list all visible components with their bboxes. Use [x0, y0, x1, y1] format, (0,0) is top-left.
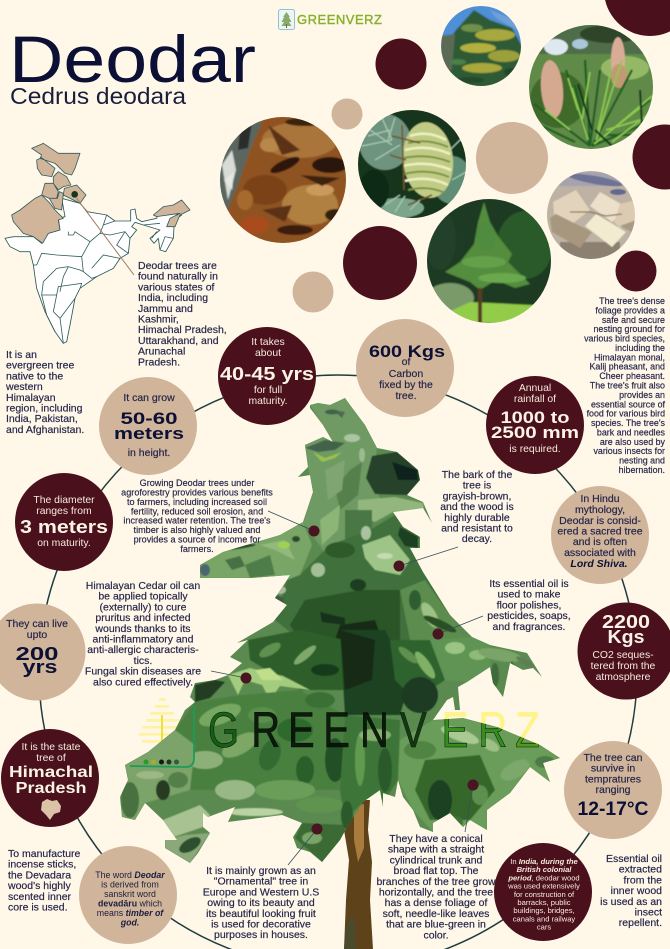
watermark: green frame [130, 706, 194, 767]
stat: state tree: Pradesh [16, 780, 86, 797]
watermark: yellow logo behind tree: GREENVERZ [208, 702, 540, 758]
text: cedar oil: be applied topically [98, 591, 188, 603]
stat: temperature: tempratures [585, 773, 641, 785]
text: nesting and food: food for various bird [587, 409, 665, 419]
text: bark: and resistant to [441, 522, 513, 534]
stat: colonial India: British colonial [517, 865, 572, 874]
stat: CO2: CO2 seques- [592, 650, 654, 661]
stat: word origin: sanskrit word [104, 889, 156, 899]
text: evergreen tree: western [5, 381, 43, 393]
text: essential oil uses: used to make [497, 589, 561, 601]
tree illustration [110, 395, 570, 949]
text: nesting and food: nesting and [619, 456, 665, 466]
text: evergreen tree: India, Pakistan, [6, 413, 78, 425]
stat: mythology: Deodar is consid- [559, 515, 641, 527]
stat: temperature: 12-17°C [578, 799, 649, 820]
text: cedar oil: Himalayan Cedar oil can [86, 580, 200, 592]
text: cedar oil: pruritus and infected [95, 612, 191, 624]
stat: CO2: tered from the [591, 661, 656, 672]
stat: rainfall: 2500 mm [491, 424, 579, 442]
stat: mythology: ered a sacred tree [557, 526, 643, 538]
stat: rainfall [486, 376, 584, 474]
photo: golden deodar tree [441, 6, 521, 86]
text: agroforestry: fertility, reduced soil erosion, and [131, 506, 263, 516]
stat: maturity: about [255, 348, 281, 359]
text: conical shape: color. [423, 929, 449, 941]
text: conical shape: that are blue-green in [386, 919, 486, 931]
stat: state tree: It is the state [22, 742, 81, 753]
text: evergreen tree: It is an [6, 349, 37, 361]
callout markers on tree [211, 511, 483, 865]
stat: height: It can grow [123, 392, 175, 404]
stat: diameter: 3 meters [20, 517, 108, 537]
stat: height: 50-60 [120, 409, 178, 428]
text: nesting and food: species. The tree's [591, 418, 666, 428]
map: leader line [77, 198, 134, 275]
text: incense sticks: the Devadara [8, 869, 71, 881]
stat: word origin: The word Deodar [95, 870, 165, 880]
stat: word origin: god. [120, 918, 139, 928]
text: native states: various states of [138, 281, 215, 293]
stat: colonial India: for construction of [514, 890, 575, 899]
stat: mythology: Lord Shiva. [570, 558, 628, 570]
stat: carbon: fixed by the [379, 379, 433, 391]
stat: word origin [79, 846, 177, 944]
subtitle: Cedrus deodara [10, 83, 186, 109]
photo: green deodar cone [358, 110, 466, 218]
text: evergreen tree: and Afghanistan. [6, 424, 84, 436]
text: bark: and the wood is [440, 501, 514, 513]
stat: diameter: The diameter [33, 495, 95, 506]
stat: word origin: means timber of [97, 908, 164, 918]
stat: word origin: devadāru which [98, 898, 162, 908]
text: incense sticks: scented inner [8, 891, 72, 903]
photo: pine needles with pink cones [528, 24, 654, 150]
text: insect repellent: inner wood [611, 885, 662, 897]
photo: deodar in forest [424, 198, 553, 324]
text: nesting and food: Kalij pheasant, and [590, 362, 665, 372]
text: insect repellent: extracted [619, 864, 662, 876]
stat: CO2: 2200 [602, 612, 650, 632]
text: ornamental: owing to its beauty and [207, 897, 315, 909]
text: agroforestry: agroforestry provides various benefits [121, 487, 273, 497]
stat: diameter [15, 473, 113, 571]
stat: lifespan: yrs [22, 657, 58, 677]
stat: colonial India: buildings, bridges, [513, 906, 575, 915]
stat: lifespan [0, 604, 86, 700]
text: evergreen tree: Himalayan [6, 392, 56, 404]
map of India [5, 143, 190, 343]
title: Deodar [9, 22, 256, 96]
text: nesting and food: various bird species, [584, 334, 665, 344]
text: ornamental: is used for decorative [211, 918, 311, 930]
stat: lifespan: 200 [16, 644, 58, 664]
text: evergreen tree: evergreen tree [6, 360, 74, 372]
text: cedar oil: also cured effectively. [93, 676, 193, 688]
watermark: dots [144, 760, 179, 764]
map: state borders [33, 215, 173, 343]
text: cedar oil: Fungal skin diseases are [85, 666, 201, 678]
stat: colonial India: cars [537, 923, 551, 932]
photo: bark [215, 115, 350, 245]
text: agroforestry: farmers. [180, 544, 214, 554]
logo: Greenverz header: GREENVERZ [297, 12, 382, 27]
stat: diameter: ranges from [36, 506, 92, 517]
text: bark: highly durable [444, 512, 510, 524]
watermark: dark logo over tree: GREENV ERZ [208, 702, 540, 758]
text: essential oil uses: pesticides, soaps, [487, 610, 571, 622]
stat: diameter: on maturity. [37, 538, 91, 549]
stat: carbon: tree. [395, 390, 417, 402]
decorative circles cluster [292, 0, 670, 312]
stat: temperature [564, 741, 662, 839]
text: nesting and food: The tree's dense [599, 296, 665, 306]
text: ornamental: It is mainly grown as an [206, 865, 316, 877]
stat: maturity: for full [254, 385, 282, 396]
stat: state tree: tree of [36, 753, 66, 764]
stat: carbon: of [402, 356, 410, 368]
stat: colonial India: In India, during the [510, 857, 579, 866]
photo: soaps with lavender [545, 170, 637, 262]
stat: colonial India: period, deodar wood [507, 873, 580, 882]
stat: mythology: associated with [564, 547, 636, 559]
text: native states: Kashmir, [138, 314, 179, 326]
text: bark: tree is [463, 480, 491, 492]
stat: carbon: Carbon [389, 368, 423, 380]
text: incense sticks: core is used. [8, 902, 68, 914]
text: native states: Pradesh. [138, 356, 180, 368]
text: evergreen tree: region, including [6, 402, 83, 414]
stat: colonial India: was used extensively [507, 882, 580, 891]
stat: maturity: It takes [251, 337, 285, 348]
text: incense sticks: incense sticks, [8, 859, 76, 871]
text: nesting and food: The tree's fruit also [590, 381, 665, 391]
text: cedar oil: wounds thanks to its [94, 623, 191, 635]
text: nesting and food: bark and needles [597, 427, 666, 437]
text: incense sticks: wood's highly [7, 880, 71, 892]
text: nesting and food: nesting ground for [593, 324, 665, 334]
stat: CO2: atmosphere [596, 672, 651, 683]
text: agroforestry: timber is also highly valued and [134, 525, 260, 535]
text: agroforestry: Growing Deodar trees under [140, 478, 254, 488]
text: nesting and food: hibernation. [619, 465, 665, 475]
text: essential oil uses: Its essential oil is [489, 578, 569, 590]
stat: lifespan: They can live [6, 618, 68, 630]
text: nesting and food: various insects for [593, 446, 665, 456]
text: agroforestry: provides a source of income for [134, 535, 260, 545]
stat: height [99, 377, 197, 475]
stat: mythology: and is often [573, 536, 627, 548]
text: nesting and food: including the [615, 343, 665, 353]
text: nesting and food: Himalayan monal, [594, 352, 665, 362]
text: conical shape: cylindrical trunk and [390, 854, 483, 866]
text: bark: decay. [462, 533, 492, 545]
stat: maturity [218, 327, 316, 425]
stat: maturity: maturity. [248, 396, 288, 407]
tree foliage [110, 395, 570, 865]
map: location marker [71, 191, 78, 198]
text: nesting and food: safe and secure [602, 315, 665, 325]
text: insect repellent: from the [623, 874, 662, 886]
text: conical shape: broad flat top. The [393, 865, 479, 877]
stat: rainfall: Annual [519, 383, 551, 394]
text: conical shape: branches of the tree grow [376, 876, 496, 888]
text: native states: Himachal Pradesh, [138, 324, 227, 336]
stat: state tree: Himachal [9, 764, 93, 781]
text: native states: found naturally in [138, 271, 218, 283]
stat: colonial India: barracks, public [517, 898, 571, 907]
text: insect repellent: is used as an [600, 896, 662, 908]
text: insect repellent: insect [635, 906, 662, 918]
text: cedar oil: (externally) to cure [100, 601, 187, 613]
text: cedar oil: tics. [134, 655, 152, 667]
text: agroforestry: to farmers, including increased soil [127, 497, 267, 507]
stat: mythology: mythology, [575, 504, 625, 516]
stat: temperature: The tree can [584, 752, 643, 764]
timeline ring [39, 375, 637, 949]
text: native states: Uttarakhand, and [138, 335, 219, 347]
text: insect repellent: Essential oil [606, 853, 662, 865]
stat: colonial India [494, 843, 592, 941]
text: conical shape: horizontally, and the tree [379, 886, 493, 898]
text: essential oil uses: floor polishes, [497, 599, 561, 611]
tree trunk [344, 800, 373, 949]
text: nesting and food: are also used by [600, 437, 666, 447]
text: agroforestry: increased water retention. The tree's [123, 516, 271, 526]
text: nesting and food: essential source of [591, 399, 666, 409]
stat: maturity: 40-45 yrs [220, 364, 314, 384]
stat: mythology [551, 486, 649, 584]
stat: rainfall: 1000 to [500, 409, 570, 427]
text: insect repellent: repellent. [619, 917, 662, 929]
text: bark: The bark of the [442, 469, 512, 481]
text: nesting and food: Cheer pheasant. [599, 371, 665, 381]
map: tan highlighted states [12, 143, 190, 243]
stat: rainfall: is required. [509, 444, 561, 455]
logo: Greenverz header [278, 10, 382, 30]
stat: height: in height. [128, 447, 170, 459]
text: ornamental: "Ornamental" tree in [214, 876, 308, 888]
text: native states: Arunachal [138, 346, 185, 358]
text: conical shape: soft, needle-like leaves [383, 908, 489, 920]
text: nesting and food: provides an [619, 390, 665, 400]
text: cedar oil: anti-inflammatory and [93, 634, 194, 646]
text: bark: grayish-brown, [443, 490, 511, 502]
text: native states: Deodar trees are [138, 260, 217, 272]
stat: lifespan: upto [27, 629, 47, 641]
text: ornamental: purposes in houses. [214, 929, 308, 941]
stat: carbon [356, 319, 454, 417]
text: conical shape: has a dense foliage of [385, 897, 487, 909]
stat: state tree [1, 729, 99, 827]
stat: temperature: survive in [591, 763, 635, 775]
text: native states: Jammu and [138, 303, 193, 315]
text: incense sticks: To manufacture [8, 848, 81, 860]
text: evergreen tree: native to the [6, 370, 63, 382]
text: essential oil uses: and fragrances. [493, 621, 565, 633]
text: conical shape: They have a conical [389, 833, 483, 845]
text: cedar oil: anti-allergic characteris- [87, 644, 199, 656]
icon: Himachal Pradesh map [41, 799, 61, 820]
text: ornamental: Europe and Western U.S [203, 886, 319, 898]
stat: CO2 [578, 602, 670, 700]
stat: CO2: Kgs [608, 627, 644, 647]
stat: rainfall: rainfall of [514, 394, 556, 405]
stat: temperature: ranging [595, 784, 631, 796]
text: ornamental: its beautiful looking fruit [206, 908, 316, 920]
map: white states [5, 198, 182, 343]
stat: word origin: is derived from [101, 880, 159, 890]
stat: colonial India: canals and railway [513, 914, 575, 923]
text: native states: India, including [138, 292, 208, 304]
text: nesting and food: foliage provides a [595, 305, 665, 315]
text: conical shape: shape with a straight [388, 844, 484, 856]
stat: carbon: 600 Kgs [369, 342, 445, 361]
stat: mythology: In Hindu [580, 493, 620, 505]
stat: height: meters [114, 424, 184, 443]
